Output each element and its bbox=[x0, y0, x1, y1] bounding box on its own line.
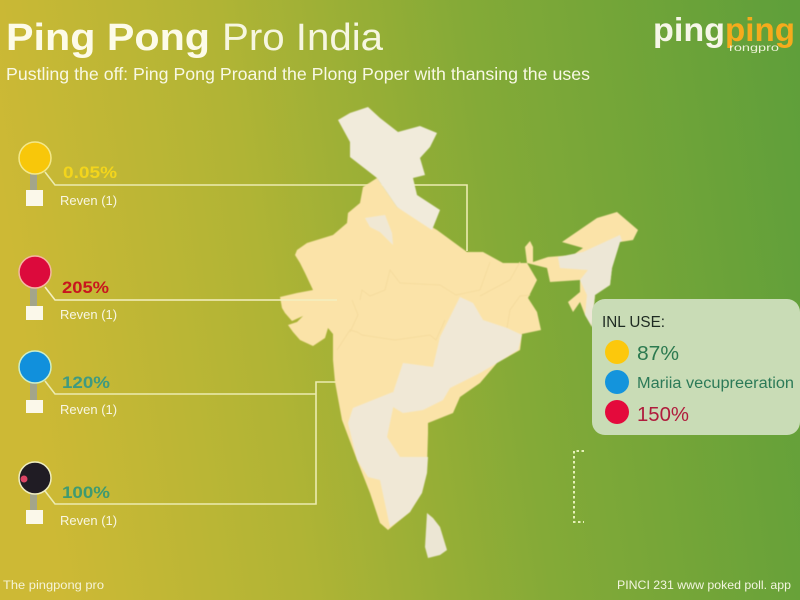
legend item: red: 150% bbox=[637, 404, 689, 426]
marker 3: blue: Reven (1) bbox=[60, 402, 117, 417]
marker 4: black paddle bbox=[19, 462, 117, 528]
map: Sri Lanka bbox=[425, 513, 447, 558]
marker 4: black paddle: Reven (1) bbox=[60, 513, 117, 528]
map: central patch bbox=[365, 215, 393, 245]
connector line over map: red bbox=[45, 287, 337, 300]
map: northeast patch bbox=[558, 235, 622, 327]
marker 1: yellow: Reven (1) bbox=[60, 193, 117, 208]
map of India bbox=[280, 107, 638, 558]
marker 2: red bbox=[19, 256, 117, 322]
marker 2: red: Reven (1) bbox=[60, 307, 117, 322]
subtitle: Pustling the off: Ping Pong Proand the Plong Poper with thansing the uses bbox=[6, 64, 590, 84]
legend panel bbox=[592, 299, 800, 435]
connector lines behind map bbox=[45, 172, 467, 504]
legend heading: INL USE: bbox=[602, 314, 665, 331]
legend item: yellow bbox=[605, 340, 679, 365]
marker 3: blue bbox=[19, 351, 117, 417]
logo: pingping pongpro: ping bbox=[653, 11, 725, 48]
logo: pingping pongpro bbox=[653, 11, 795, 54]
marker 2: red: 205% bbox=[62, 278, 109, 297]
title: Pro India bbox=[222, 17, 384, 59]
dashed bracket bbox=[574, 451, 584, 522]
legend item: blue: Mariia vecupreeration bbox=[637, 375, 794, 392]
logo: pingping pongpro: ping bbox=[725, 11, 795, 48]
marker 3: blue: 120% bbox=[62, 373, 110, 392]
legend item: yellow: 87% bbox=[637, 343, 679, 365]
map: state border lines bbox=[337, 262, 530, 405]
map: eastern and southern patches bbox=[393, 297, 522, 413]
footer left: The pingpong pro bbox=[3, 580, 104, 592]
title bbox=[6, 17, 384, 59]
marker 1: yellow bbox=[19, 142, 117, 208]
marker 4: black paddle: 100% bbox=[62, 483, 110, 502]
marker 1: yellow: 0.05% bbox=[63, 163, 117, 182]
map: northeast states bbox=[525, 212, 638, 327]
title: Ping Pong bbox=[6, 17, 210, 59]
footer right: PINCI 231 www poked poll. app bbox=[617, 578, 791, 592]
legend item: red bbox=[605, 400, 689, 426]
map: main body bbox=[280, 178, 541, 530]
map: northern states bbox=[338, 107, 440, 230]
logo: pingping pongpro: rongpro bbox=[729, 43, 780, 54]
legend item: blue bbox=[605, 370, 794, 394]
